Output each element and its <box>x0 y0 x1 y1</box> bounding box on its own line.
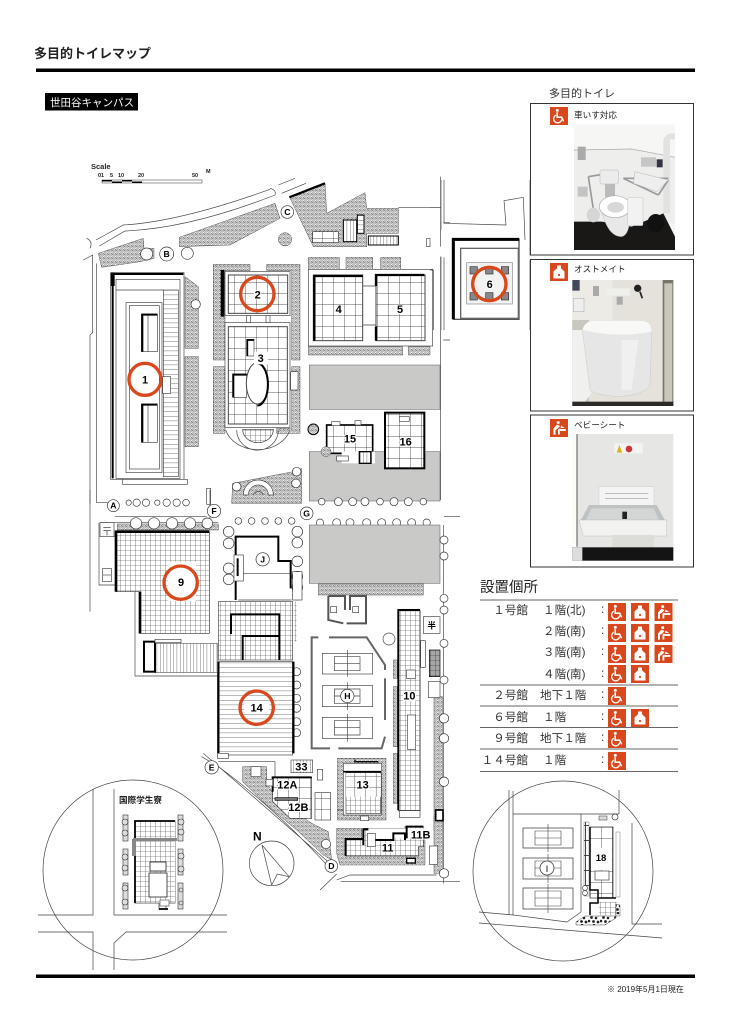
photo: accessible toilet <box>574 124 675 250</box>
scale bar: 01 <box>98 173 104 179</box>
row: building 14 <box>482 752 626 770</box>
table dividers <box>480 600 678 772</box>
building 1: 1 <box>142 374 148 386</box>
row: building 2 <box>493 687 626 705</box>
tennis courts H <box>312 637 385 748</box>
gate A <box>107 500 119 512</box>
campus map north section <box>83 177 450 506</box>
gate B: B <box>164 249 170 259</box>
building 3 <box>225 323 298 450</box>
building 9: 9 <box>178 577 184 589</box>
building 13: 13 <box>357 779 369 791</box>
annex west of building 14 <box>144 639 217 673</box>
heading: toilets: 多目的トイレ <box>549 86 615 100</box>
post office symbols <box>100 523 114 582</box>
row: building 9 <box>493 730 626 748</box>
row: building 14: １４号館 <box>482 754 528 767</box>
tennis courts I: I <box>546 864 548 874</box>
building 18 <box>576 814 620 925</box>
row: building 1, floor 4: : <box>601 667 604 680</box>
row: building 9: : <box>601 731 604 744</box>
buildings 4 and 5: 4 <box>336 304 343 316</box>
gate F: F <box>211 506 217 516</box>
icon: baby seat <box>550 419 568 437</box>
row: building 1, floor 3: ３階(南) <box>543 645 586 659</box>
buildings 12A and 12B: 12B <box>288 802 308 814</box>
north entrance structures <box>289 183 430 247</box>
building 3: 3 <box>258 353 264 365</box>
building 2: 2 <box>255 289 261 301</box>
campus label <box>45 93 138 110</box>
building 10 <box>383 610 425 817</box>
gate E: E <box>209 762 215 772</box>
photo: ostomate basin <box>572 280 673 406</box>
campus label: 世田谷キャンパス <box>50 97 134 109</box>
building 15 <box>308 421 375 463</box>
inset: court I and building 18 <box>473 781 662 961</box>
building 16: 16 <box>400 436 412 448</box>
buildings 12A and 12B: 12A <box>277 780 297 792</box>
row: building 1, floor 4 <box>543 665 649 683</box>
gate G <box>300 507 313 520</box>
garden beds <box>318 584 423 623</box>
gate C <box>281 206 294 218</box>
panel: wheelchair toilet <box>530 104 694 255</box>
row: building 1, floor 3: : <box>601 645 604 658</box>
footnote: ※ 2019年5月1日現在 <box>607 984 684 994</box>
tree rows <box>126 498 427 506</box>
title: 多目的トイレマップ <box>34 46 151 61</box>
baby seat label: ベビーシート <box>574 420 625 430</box>
dormitory building <box>132 821 177 909</box>
building 33 <box>291 760 313 774</box>
row: building 1, floor 1: : <box>601 603 604 616</box>
row: building 14: １階 <box>543 754 567 767</box>
gate A: A <box>110 501 117 511</box>
dormitory planting <box>122 815 184 909</box>
table: locations <box>480 600 678 772</box>
parking grey area lower <box>309 452 440 501</box>
J block: J <box>260 554 265 564</box>
building 14: 14 <box>251 702 264 714</box>
north arrow <box>249 830 294 886</box>
parking grey area upper <box>309 365 440 409</box>
row: building 1, floor 1 <box>493 603 672 621</box>
building 33: 33 <box>295 762 307 774</box>
footer rule <box>36 974 695 978</box>
row: building 1, floor 1: １号館 <box>493 604 528 617</box>
scale bar <box>91 162 211 183</box>
building 6 <box>430 180 540 330</box>
panel: baby seat <box>530 415 694 567</box>
scale bar: 20 <box>138 173 144 179</box>
amphitheatre planting <box>232 467 302 503</box>
row: building 1, floor 2: : <box>601 624 604 637</box>
building 1 <box>111 273 187 484</box>
row: building 9: ９号館 <box>493 732 528 745</box>
east side features: 半 <box>427 619 436 630</box>
photo: baby seat <box>572 434 673 561</box>
building 18: 18 <box>596 853 606 864</box>
gate D: D <box>328 861 334 871</box>
building 2 <box>221 270 290 323</box>
campus map south section <box>90 490 460 890</box>
gate B <box>160 247 174 261</box>
row: building 6: : <box>601 710 604 723</box>
row: building 2: : <box>601 688 604 701</box>
buildings 4 and 5: 5 <box>397 304 403 316</box>
small block <box>317 769 323 780</box>
row: building 1, floor 2: ２階(南) <box>543 624 586 638</box>
building 11: 11 <box>382 843 393 855</box>
row: building 1, floor 4: ４階(南) <box>543 667 586 681</box>
panel: ostomate <box>530 260 694 411</box>
heading: installed locations: 設置個所 <box>480 579 538 596</box>
buildings 12A and 12B <box>243 767 332 860</box>
row: building 14: : <box>601 753 604 766</box>
building 16 <box>385 413 424 468</box>
row: building 6 <box>493 709 649 727</box>
row: building 9: 地下１階 <box>540 732 587 745</box>
east side features <box>423 536 449 878</box>
scale bar: M <box>206 169 211 175</box>
scale bar: Scale <box>91 162 111 171</box>
inset: international student dormitory <box>38 780 227 970</box>
row: building 1, floor 1: １階(北) <box>543 604 586 617</box>
south roads and outlines <box>90 490 460 890</box>
building 10: 10 <box>403 691 415 703</box>
wheelchair label: 車いす対応 <box>574 109 617 120</box>
building 11: 11B <box>411 830 431 842</box>
stipple planting areas <box>98 183 430 447</box>
row: building 6: ６号館 <box>493 711 528 724</box>
scale bar: 5 <box>110 173 113 179</box>
tree row south <box>130 518 430 737</box>
tennis courts H: H <box>344 691 350 701</box>
building 14 <box>218 602 297 759</box>
parking grey area south <box>309 525 440 583</box>
row: building 2: 地下１階 <box>540 689 587 702</box>
inset title: 国際学生寮 <box>119 794 162 805</box>
row: building 1, floor 2 <box>543 624 672 642</box>
J block <box>234 537 302 600</box>
gate F <box>207 504 221 518</box>
icon: wheelchair <box>550 107 568 125</box>
row: building 6: １階 <box>543 711 567 724</box>
buildings 4 and 5 <box>308 269 433 346</box>
roads north <box>83 177 450 503</box>
ostomate label: オストメイト <box>574 264 626 274</box>
building 9 <box>116 532 209 633</box>
building 11 <box>337 827 431 865</box>
gate G: G <box>303 508 310 518</box>
gate E <box>205 761 218 774</box>
scale bar: 50 <box>192 173 198 179</box>
row: building 2: ２号館 <box>493 689 528 702</box>
header rule <box>36 68 695 72</box>
building 6: 6 <box>487 279 493 291</box>
building 13 <box>337 758 386 821</box>
icon: ostomate <box>550 263 568 281</box>
gate D <box>325 860 338 872</box>
gate C: C <box>284 207 291 217</box>
tennis courts I <box>523 824 573 913</box>
building 15: 15 <box>344 433 356 445</box>
row: building 1, floor 3 <box>543 645 672 663</box>
north arrow: N <box>253 830 262 844</box>
scale bar: 10 <box>118 173 124 179</box>
